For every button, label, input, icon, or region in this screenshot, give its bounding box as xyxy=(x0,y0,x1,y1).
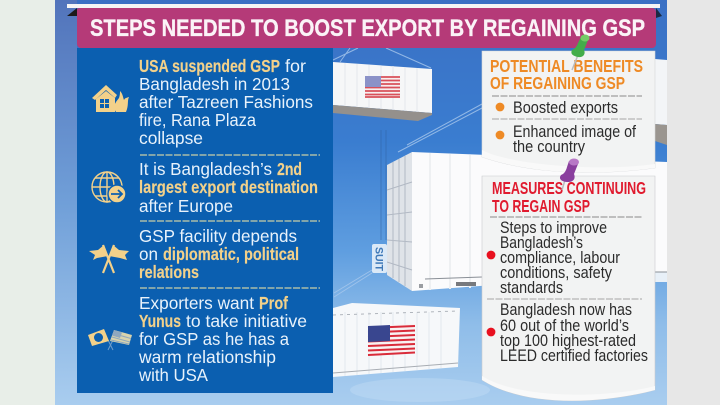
fact 4 text: Exporters want xyxy=(139,293,254,313)
bullet: LEED factories: LEED certified factories xyxy=(500,347,648,365)
fact 4 text: Yunus xyxy=(139,311,181,331)
measures heading: MEASURES CONTINUING xyxy=(492,178,646,198)
divider xyxy=(140,154,320,156)
bullet: boosted exports: Boosted exports xyxy=(513,99,618,117)
fact 2 text: after Europe xyxy=(139,196,233,216)
bullet: enhanced image: Enhanced image of xyxy=(513,123,636,141)
divider xyxy=(140,287,320,289)
bullet: LEED factories xyxy=(487,301,648,365)
benefits heading xyxy=(490,56,643,93)
icon: globe with arrow xyxy=(92,172,126,203)
fact 4 text: to take initiative xyxy=(186,311,307,331)
fact 1 text: after Tazreen Fashions xyxy=(139,92,313,112)
bullet: compliance steps: conditions, safety xyxy=(500,264,613,282)
fact 2 text: largest export destination xyxy=(139,177,318,197)
bullet: compliance steps: Steps to improve xyxy=(500,219,607,237)
icon: green pin xyxy=(571,34,590,70)
container: bottom with US flag xyxy=(333,303,460,377)
fact 2 text xyxy=(139,159,318,216)
title banner xyxy=(67,8,662,48)
divider xyxy=(140,220,320,222)
icon: US flag on bottom container xyxy=(368,324,415,356)
container: right edge sliver xyxy=(655,59,667,145)
icon: purple pin xyxy=(560,158,579,190)
fact 4 text: Prof xyxy=(259,293,288,313)
fact 3 text: GSP facility depends xyxy=(139,226,297,246)
icon: house on fire xyxy=(92,85,129,112)
fact 3 text xyxy=(139,226,299,282)
icon: Bangladesh and US flags xyxy=(88,329,132,350)
fact 2 text: 2nd xyxy=(277,159,302,179)
bullet: compliance steps xyxy=(487,219,620,297)
page background margins xyxy=(0,0,55,405)
fact 4 text: for GSP as he has a xyxy=(139,329,289,349)
bullet: LEED factories: 60 out of the world’s xyxy=(500,317,629,335)
label: SUIT tag xyxy=(372,244,387,273)
measures heading: TO REGAIN GSP xyxy=(492,196,590,216)
panel: measures xyxy=(482,176,655,401)
bullet: LEED factories: top 100 highest-rated xyxy=(500,332,636,350)
icon: crossed flags xyxy=(89,245,129,273)
fact 4 text xyxy=(138,293,307,385)
fact 1 text: USA suspended GSP xyxy=(139,56,280,76)
fact 3 text: diplomatic, political xyxy=(163,244,299,264)
top white strip xyxy=(67,4,660,8)
fact 3 text: on xyxy=(139,244,158,264)
fact 1 text: collapse xyxy=(139,128,203,148)
fact 4 text: warm relationship xyxy=(138,347,276,367)
panel: potential benefits xyxy=(482,51,655,172)
fact 1 text xyxy=(139,56,313,148)
fact 3 text: relations xyxy=(139,262,199,282)
fact 2 text: It is Bangladesh’s xyxy=(139,159,272,179)
benefits heading: OF REGAINING GSP xyxy=(490,73,625,93)
bullet: enhanced image xyxy=(496,123,636,156)
fact 1 text: Bangladesh in 2013 xyxy=(139,74,290,94)
fact 1 text: for xyxy=(285,56,306,76)
icon: US flag on top container xyxy=(365,76,400,98)
bullet: compliance steps: Bangladesh’s xyxy=(500,234,583,252)
bullet: LEED factories: Bangladesh now has xyxy=(500,301,632,319)
bullet: compliance steps: standards xyxy=(500,279,563,297)
container: large middle xyxy=(372,152,667,291)
panel: key facts xyxy=(77,48,333,393)
crane cables xyxy=(333,48,482,297)
fact 1 text: fire, Rana Plaza xyxy=(139,110,256,130)
label: SUIT tag: SUIT xyxy=(372,247,384,271)
bullet: enhanced image: the country xyxy=(513,138,586,156)
container: top with US flag xyxy=(333,62,432,121)
measures heading xyxy=(492,178,646,216)
bullet: compliance steps: compliance, labour xyxy=(500,249,620,267)
benefits heading: POTENTIAL BENEFITS xyxy=(490,56,643,76)
fact 4 text: with USA xyxy=(138,365,208,385)
